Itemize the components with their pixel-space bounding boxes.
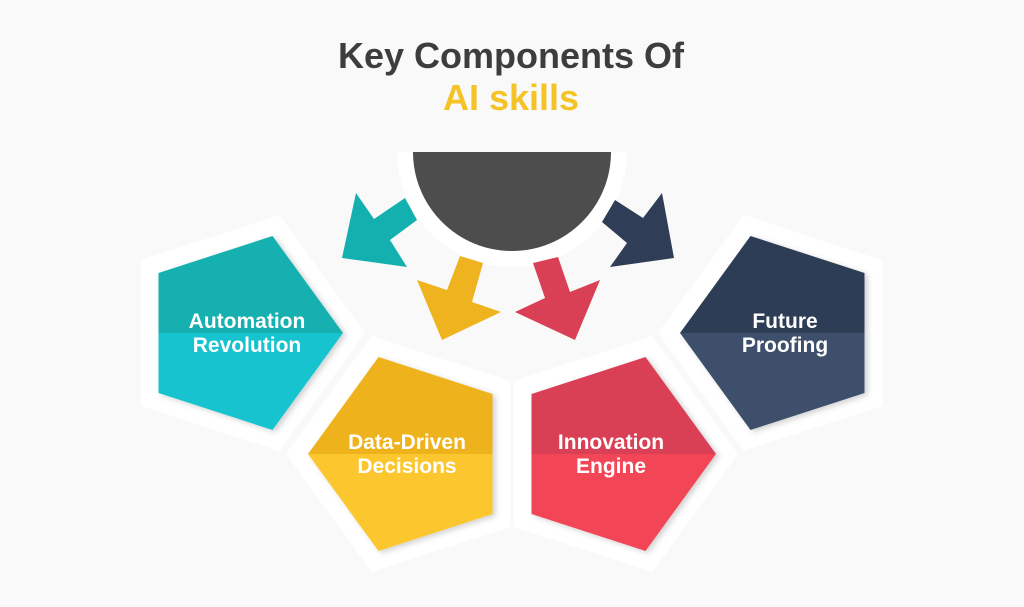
panel: automation revolution — [141, 215, 365, 451]
panel: automation revolution: Automation — [189, 310, 305, 333]
panel: innovation engine: Innovation — [558, 431, 664, 454]
panel: future proofing — [658, 215, 882, 451]
arrow: navy — [602, 193, 674, 267]
panel: automation revolution: Revolution — [193, 334, 301, 357]
panel: future proofing: Future — [752, 310, 818, 333]
panel: innovation engine: Engine — [576, 455, 646, 478]
panel: data-driven decisions — [286, 336, 510, 572]
central circle — [397, 152, 627, 267]
arrow: teal — [342, 193, 417, 267]
title — [338, 35, 685, 118]
panel: data-driven decisions: Decisions — [357, 455, 457, 478]
title: AI skills — [443, 77, 579, 118]
title: Key Components Of — [338, 35, 685, 76]
panel: data-driven decisions: Data-Driven — [348, 431, 466, 454]
panel: future proofing: Proofing — [742, 334, 828, 357]
arrow: red — [515, 257, 600, 340]
arrow: yellow — [417, 256, 501, 340]
panel: innovation engine — [514, 336, 738, 572]
